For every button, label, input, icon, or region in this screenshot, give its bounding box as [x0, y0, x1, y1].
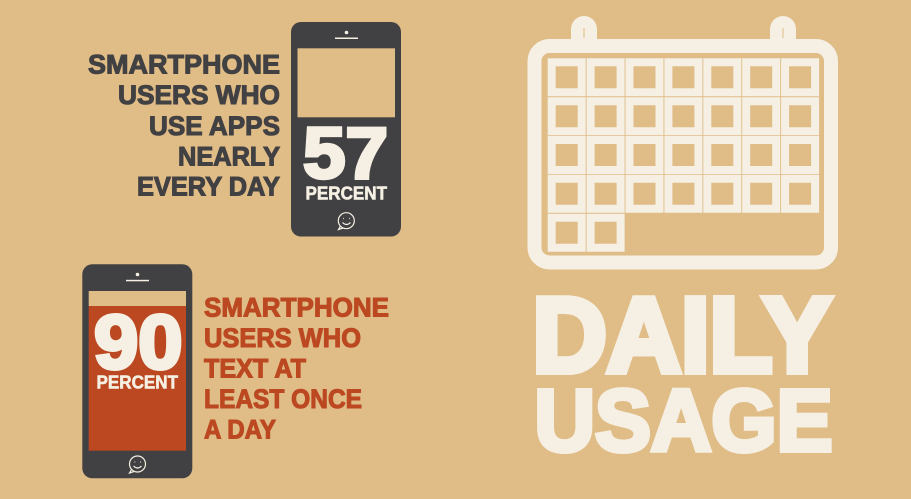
calendar rings — [571, 16, 796, 45]
icon: smiley speech bubble — [338, 213, 354, 230]
phone: 57 percent — [291, 22, 401, 236]
icon: smiley speech bubble — [130, 456, 146, 473]
icon: calendar — [534, 16, 831, 262]
text block: apps usage caption: EVERY DAY — [137, 172, 280, 202]
label: percent: PERCENT — [306, 184, 387, 204]
text block: apps usage caption: USE APPS — [149, 111, 280, 141]
number: 90: 90 — [94, 300, 182, 386]
text block: texting caption: USERS WHO — [204, 323, 361, 353]
calendar day cells — [548, 58, 819, 252]
text block: texting caption — [204, 292, 389, 444]
text block: apps usage caption: SMARTPHONE — [88, 50, 280, 80]
title: daily usage: DAILY — [532, 276, 832, 394]
number: 57: 57 — [303, 114, 388, 194]
title: daily usage: USAGE — [534, 372, 832, 470]
phone: 90 percent — [82, 264, 192, 478]
label: percent: PERCENT — [96, 373, 178, 393]
text block: apps usage caption: NEARLY — [178, 142, 280, 172]
calendar frame — [534, 46, 831, 262]
text block: texting caption: A DAY — [204, 414, 276, 444]
text block: texting caption: SMARTPHONE — [204, 292, 389, 322]
text block: texting caption: TEXT AT — [204, 354, 306, 384]
text block: apps usage caption — [88, 50, 280, 202]
title: daily usage — [532, 276, 832, 470]
text block: texting caption: LEAST ONCE — [204, 384, 362, 414]
text block: apps usage caption: USERS WHO — [118, 80, 280, 110]
